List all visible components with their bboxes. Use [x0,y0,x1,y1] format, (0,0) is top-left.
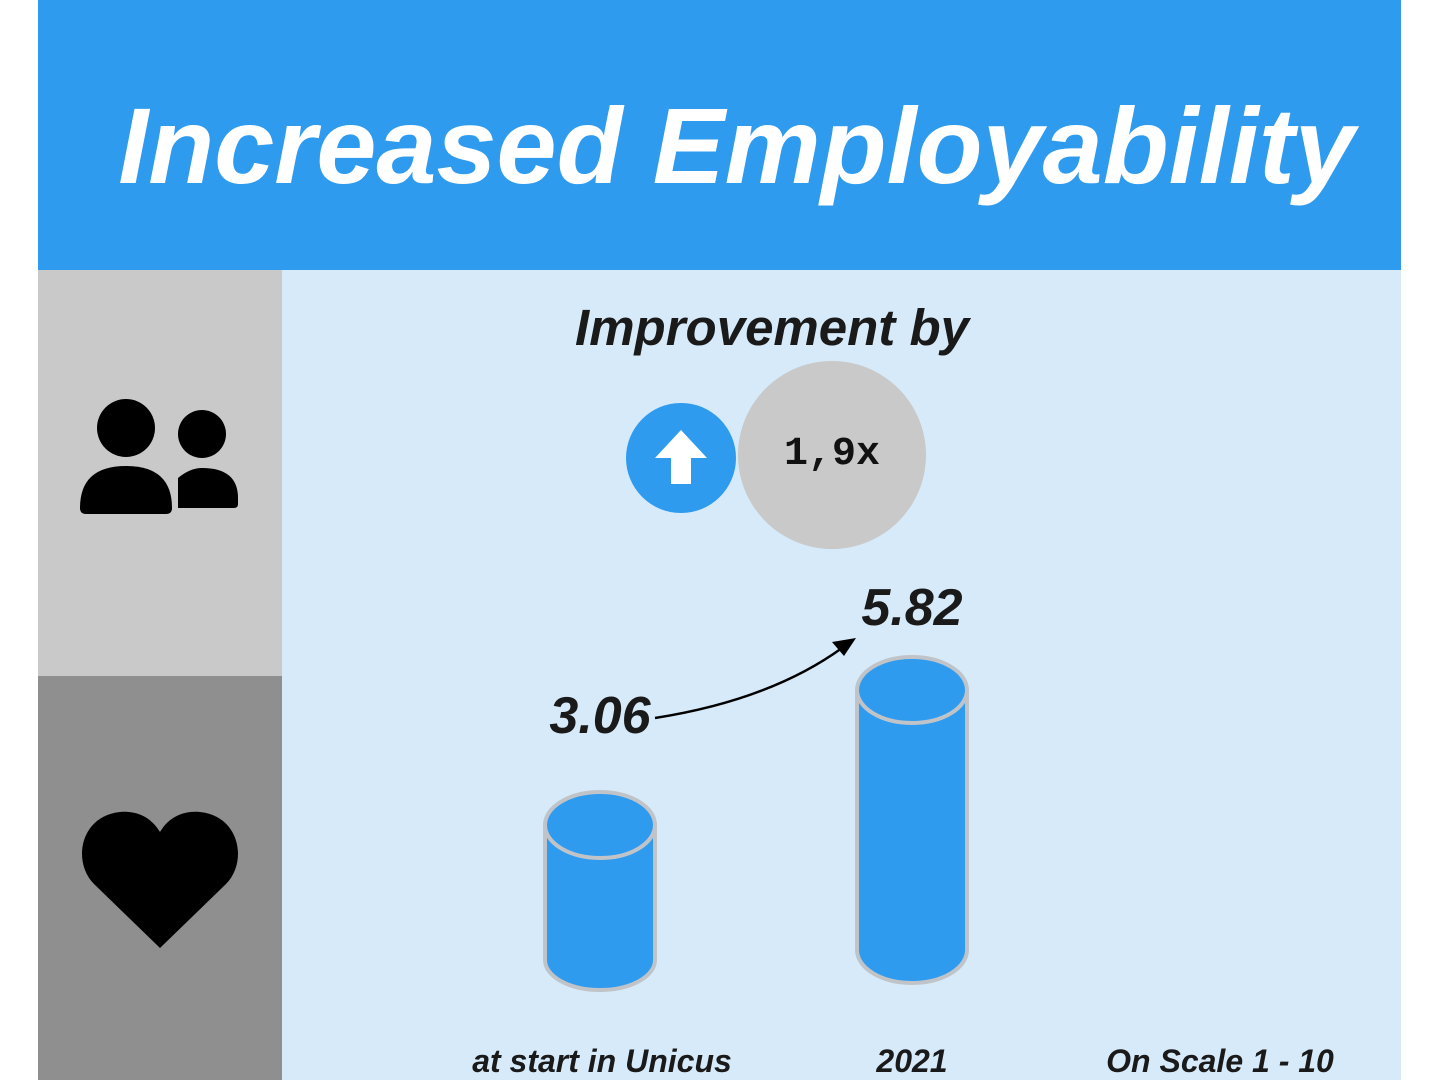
sidebar bottom panel: heart icon [38,676,282,1080]
bar chart [472,579,1334,1079]
value labels: On Scale 1 - 10 [1106,1043,1334,1079]
callout: 1,9x circle: 1,9x [784,432,880,477]
value labels: 2021 [875,1043,948,1079]
icon: up arrow circle [626,403,736,513]
value labels: 5.82 [861,579,963,637]
value labels [472,579,1334,1079]
arrow [655,638,856,718]
header banner [38,0,1401,270]
callout: 1,9x circle [738,361,926,549]
heading: improvement by: Improvement by [575,299,969,356]
title: Increased Employability [118,85,1355,206]
icon: people [80,399,238,514]
main panel [282,270,1401,1080]
sidebar top panel: people icon [38,270,282,676]
value labels: 3.06 [549,687,652,745]
value labels: at start in Unicus [472,1043,732,1079]
bar: start [545,792,655,990]
icon: heart [82,812,238,948]
bar: 2021 [857,657,967,983]
